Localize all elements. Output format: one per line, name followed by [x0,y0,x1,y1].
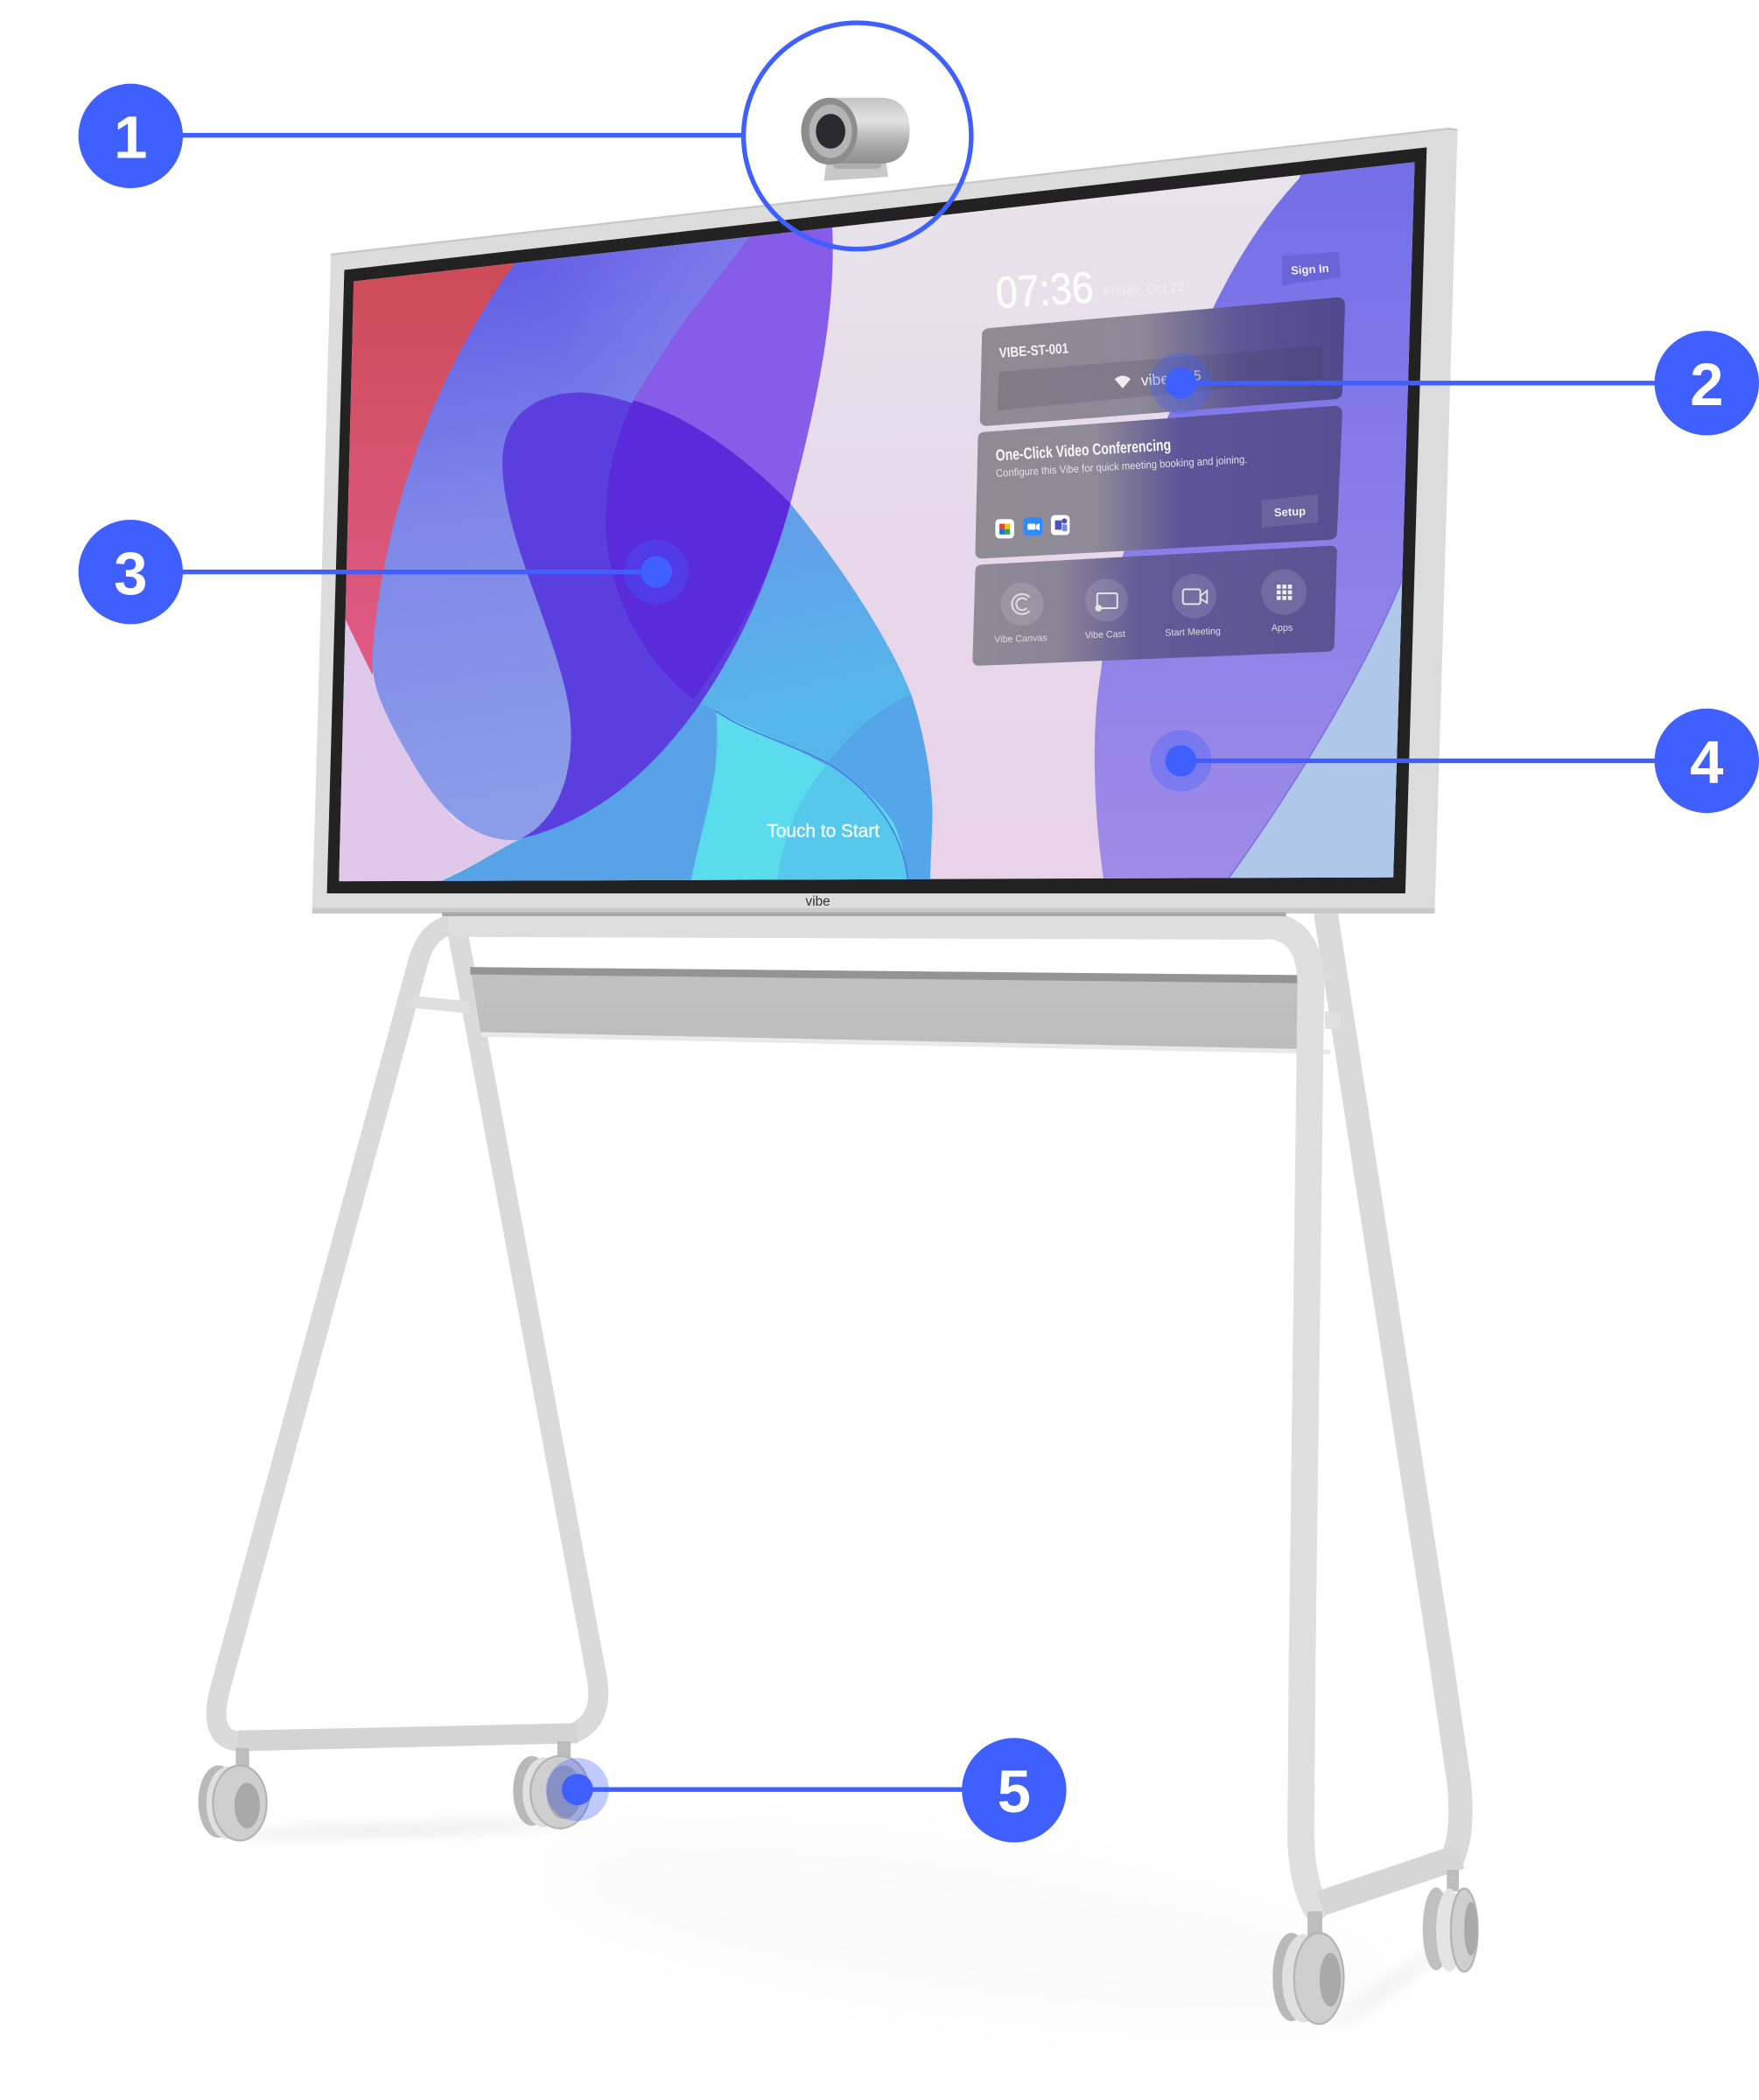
callout 1: camera [79,23,971,249]
callout 3: screen left: 3 [114,540,147,607]
teal blob [427,504,932,886]
setup button [1261,494,1318,528]
action: vibe cast [1085,578,1128,640]
icon: teams [1051,515,1069,536]
callout 5: wheel: 5 [998,1758,1031,1825]
setup button: Setup [1274,504,1306,519]
action: apps: Apps [1272,623,1293,634]
blue arc overlay [828,694,932,886]
action: vibe cast: Vibe Cast [1085,629,1125,640]
purple blob [632,228,833,504]
action: start meeting: Start Meeting [1165,626,1221,639]
panel: one-click video conferencing [975,406,1342,558]
callout 2: panel: 2 [1690,351,1723,418]
icon: zoom [1024,517,1042,536]
clock [994,256,1186,318]
rear right leg [1327,916,1461,1859]
red shape [345,262,515,676]
stand [216,916,1461,1908]
brand mark: vibe [806,894,830,909]
action: vibe canvas: Vibe Canvas [994,633,1048,645]
crossbar left [413,1002,469,1007]
icon: meet [995,519,1014,538]
sign in button: Sign In [1291,262,1329,277]
right purple [1095,147,1426,891]
display frame [312,129,1458,916]
screen wallpaper [321,147,1433,898]
panel: network status: vibe [1140,370,1170,389]
panel: one-click video conferencing: Configure this Vibe for quick meeting booking and joining. [996,453,1248,480]
wheel front left [199,1748,267,1840]
lower blue [427,699,717,886]
action: start meeting [1165,574,1221,639]
callout 1: camera: 1 [114,104,147,172]
light blue corner [1224,570,1406,884]
callout 4: screen right [1150,709,1759,813]
camera [801,98,909,181]
panel: network status [980,298,1345,426]
front right tube [1266,926,1315,1908]
tray [470,967,1341,1054]
blue blob [372,221,764,858]
floor shadow [235,1795,1457,2063]
wheel rear big [1272,1911,1343,2024]
right bottom bar [1321,1857,1461,1903]
panel: quick actions [972,546,1337,666]
clock: 07:36 [994,262,1095,318]
rear left leg and bottom bar [216,924,599,1741]
wheel rear small [1423,1870,1478,1971]
touch to start label: Touch to Start [767,821,880,842]
callout 4: screen right: 4 [1690,729,1723,796]
callout 3: screen left [79,520,689,624]
action: apps [1261,570,1307,634]
panel: one-click video conferencing: One-Click Video Conferencing [995,435,1172,465]
blue highlight [602,236,749,372]
panel: network status: 5 [1194,369,1201,384]
wheels [199,1741,1478,2024]
callout 2: panel [1150,331,1759,436]
violet blob [502,393,790,838]
bezel [327,147,1426,893]
callout 5: wheel [546,1738,1067,1843]
top bar [449,924,1266,927]
action: vibe canvas [994,583,1048,645]
wheel front right [513,1741,590,1829]
icon: wifi [1115,375,1131,388]
panel: network status: VIBE-ST-001 [999,340,1069,361]
cyan shape [690,711,908,886]
sign in button [1282,252,1341,285]
clock: Friday, Oct 22 [1103,280,1185,299]
left bottom bar thickening [239,1733,578,1740]
